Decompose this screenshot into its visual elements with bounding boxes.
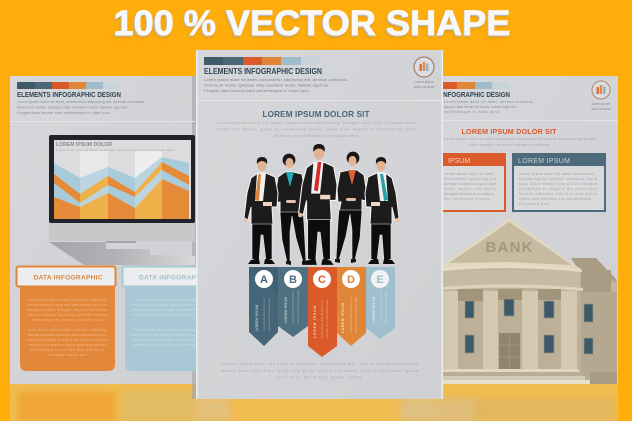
icon: chart badge: [413, 57, 435, 89]
box: slate lorem ipsum: Montes nascetur ridiculus mus donec: [519, 192, 597, 196]
box: red lorem ipsum: Natoque penatibus et magnis: [444, 192, 494, 196]
arrow: B: Lorem ipsum dolor sit amet cons: [291, 289, 295, 323]
box: slate lorem ipsum: Lorem ipsum dolor sit amet consectetur: [519, 172, 595, 176]
text block: Dolor massa cum sociis natoque penatibus: [469, 143, 549, 147]
icon: chart badge: [591, 81, 611, 111]
person: man red tie: [298, 144, 337, 265]
arrow: A: [249, 267, 278, 346]
card: orange text: nascetur ridiculus mus donec quam felis ultricies: [28, 343, 106, 347]
panel: right page: [406, 76, 618, 384]
box: slate lorem ipsum: Quam felis ultricies nec pellentesque: [519, 197, 591, 201]
monitor: [49, 135, 195, 265]
heading: lorem ipsum: LOREM IPSUM DOLOR SIT: [262, 110, 370, 119]
colour strip: [204, 57, 320, 65]
card: orange text: natoque penatibus et magnis dis parturient montes: [27, 338, 107, 342]
heading: ELEMENTS INFOGRAPHIC DESIGN: [406, 92, 510, 99]
card: orange text: [20, 287, 115, 371]
text block: Feugiat diam laoreet ante pellentesque in vitae nunc.: [204, 88, 310, 93]
arrow: A: A: [260, 274, 268, 286]
text block: [204, 77, 347, 93]
label: data infographic blue: DATA INFOGRAPHIC: [139, 274, 208, 282]
person: man orange tie: [244, 157, 278, 264]
arrow: D: [337, 267, 366, 346]
card: blue text: Aenean commodo ligula eget dolor massa: [132, 333, 195, 337]
box: slate lorem ipsum: Eget dolor massa cum sociis natoque: [519, 182, 597, 186]
card: orange text: nascetur ridiculus mus donec quam felis ultricies: [27, 313, 107, 317]
box: red lorem ipsum: Dis parturient montes: [444, 197, 490, 201]
card: orange text: Lorem ipsum dolor sit amet consectetur adipiscing: [28, 328, 106, 332]
title: 100 % VECTOR SHAPE: [114, 4, 511, 43]
text block: [444, 137, 596, 147]
card: orange text: pellentesque eu pretium quis sem nulla: [32, 318, 102, 322]
reflection band: [10, 384, 618, 421]
arrow: C: [308, 267, 337, 357]
box: red lorem ipsum: IPSUM: [448, 158, 470, 165]
icon: chart badge: Lorem ipsum: [414, 80, 434, 84]
arrow: D: D: [347, 274, 355, 286]
text block: Viverra mi mollis. Quisque vitae hendrerit turpis. Nullam eget leo: [204, 82, 328, 88]
text block: [17, 100, 144, 115]
card: blue text: [125, 287, 200, 371]
card: blue text: nascetur ridiculus mus donec quam felis: [132, 343, 195, 347]
icon: chart badge: dolor sit amet: [591, 107, 611, 111]
arrow: A: LOREM IPSUM: [255, 305, 259, 331]
arrow: B: Aenean commodo ligula eget: [296, 290, 300, 323]
box: red lorem ipsum: Consectetur adipiscing elit: [444, 177, 496, 181]
text block: footer: [222, 361, 419, 380]
icon: chart badge: Lorem ipsum: [592, 102, 611, 106]
illustration: bank: [443, 218, 617, 384]
card: orange text: Aenean commodo ligula eget dolor massa cum sociis: [27, 303, 107, 307]
text block: Viverra mi mollis. Quisque vitae hendrerit turpis. Nullam eget leo: [17, 106, 127, 110]
arrow: B: B: [289, 274, 297, 286]
card: blue text: Aenean commodo ligula eget dolor massa: [132, 303, 195, 307]
arrow: B: [278, 267, 308, 337]
icon: chart badge: dolor sit amet: [413, 85, 435, 89]
text block: Lorem ipsum dolor sit amet, aenean commodo: [444, 100, 533, 104]
panel: center page: [196, 50, 443, 399]
arrow: E: Lorem ipsum dolor sit amet cons: [379, 290, 383, 323]
label: data infographic orange: [16, 266, 116, 286]
arrow: D: Lorem ipsum dolor sit amet cons: [349, 296, 353, 333]
text block: ipsum vitae hendrerit turpis nullam eget leo: [444, 105, 516, 109]
text block: Lorem ipsum dolor sit amet, consectetur adipiscing elit. Aenean commodo: [204, 77, 347, 82]
card: blue text: Lorem ipsum dolor sit amet consectetur: [135, 298, 196, 302]
text block: Pretium nec Quisque vitae Quam ante: [274, 133, 359, 138]
box: red lorem ipsum: Lorem ipsum dolor sit amet: [444, 172, 494, 176]
box: slate lorem ipsum: Penatibus et magnis dis parturient: [519, 187, 597, 191]
text block: Lorem ipsum dolor sit amet consectetur adipiscing elit aenean commodo ligula eget: [444, 137, 596, 141]
arrow: D: LOREM IPSUM: [341, 303, 345, 333]
arrow: C: Lorem ipsum dolor sit amet cons: [320, 299, 324, 338]
arrow: C: Aenean commodo ligula eget: [325, 300, 329, 338]
label: data infographic blue: [122, 266, 208, 286]
monitor: Lorem ipsum dolor sit amet consectetur adipiscing elit aenean commodo ligula: [56, 148, 174, 152]
bank sign: BANK: [486, 239, 533, 256]
title: 100 % VECTOR SHAPE: [112, 5, 510, 44]
text block: footer: Info Plac Quid Hig Quae iacile: [276, 374, 362, 380]
card: orange text: consequat massa quis: [47, 353, 87, 357]
arrow: E: E: [376, 274, 384, 286]
text block: pellentesque in vitae nunc: [444, 110, 499, 114]
colour strip: [17, 82, 120, 89]
arrow: A: Aenean commodo ligula eget: [267, 298, 271, 331]
text block: Lorem ipsum dolor sit amet, consectetur adipiscing elit. Aenean commodo: [17, 100, 144, 104]
screen heading: LOREM IPSUM DOLOR: [56, 142, 112, 148]
colour strip: [443, 82, 509, 89]
panel: left page: [10, 76, 208, 399]
card: orange text: Aenean commodo ligula eget dolor massa cum sociis: [28, 333, 106, 337]
arrow: C: C: [318, 274, 326, 286]
title: 100 % VECTOR SHAPE: [112, 6, 510, 45]
heading: lorem ipsum: LOREM IPSUM DOLOR SIT: [462, 127, 557, 136]
illustration: business people: [244, 144, 400, 265]
card: orange text: Lorem ipsum dolor sit amet consectetur adipiscing: [28, 298, 106, 302]
box: slate lorem ipsum: LOREM IPSUM: [518, 158, 570, 165]
label: data infographic orange: DATA INFOGRAPHIC: [34, 274, 103, 282]
text block: [217, 120, 416, 138]
card: blue text: Lorem ipsum dolor sit amet consectetur: [135, 328, 196, 332]
card: blue text: natoque penatibus et magnis dis parturient: [132, 308, 195, 312]
card: orange text: pellentesque eu pretium quis sem nulla: [30, 348, 104, 352]
text block: Etiam nisi ipsum, quam ac vestibulum ipsum, Nunc nunc Mauris id lobortis nec sem: [217, 126, 416, 132]
card: orange text: natoque penatibus et magnis dis parturient montes: [27, 308, 107, 312]
text block: Lorem ipsum dolor sit amet, consectetur adipiscing. Integer sed velit id ipsum sem: [217, 120, 416, 125]
arrow: B: LOREM IPSUM: [284, 297, 288, 323]
box: slate lorem ipsum: Adipiscing elit aenean commodo ligula: [519, 177, 597, 181]
card: blue text: nascetur ridiculus mus donec quam felis: [132, 313, 195, 317]
text block: footer: Lorem ipsum dolor sit amet consectetur adipiscing elit. Sed ut perspiciatis unde: [222, 361, 419, 366]
heading: ELEMENTS INFOGRAPHIC DESIGN: [17, 92, 121, 99]
arrow: E: LOREM IPSUM: [372, 297, 376, 323]
arrow: E: [366, 267, 395, 339]
arrow: E: Aenean commodo ligula eget: [384, 291, 388, 323]
arrow: A: Lorem ipsum dolor sit amet cons: [262, 297, 266, 331]
box: slate lorem ipsum: [512, 153, 606, 211]
box: red lorem ipsum: Dolor massa cum sociis: [444, 187, 496, 191]
box: red lorem ipsum: Aenean commodo ligula eget: [444, 182, 496, 186]
box: slate lorem ipsum: Eu pretium quis: [519, 202, 549, 206]
person: woman teal top: [276, 154, 307, 265]
text block: footer: Nemo Tam nibh Plac Quid Hig Quaz aciem ius enim, nisi It is Lorem ipsum: [222, 368, 419, 373]
text block: Feugiat diam laoreet ante pellentesque in vitae nunc.: [17, 111, 111, 115]
area chart: [54, 157, 189, 219]
person: woman orange top: [335, 152, 366, 263]
box: red lorem ipsum: [420, 153, 506, 211]
person: man teal tie: [365, 157, 400, 264]
heading: ELEMENTS INFOGRAPHIC DESIGN: [204, 67, 322, 76]
text block: [444, 100, 533, 114]
arrow: D: Aenean commodo ligula eget: [354, 297, 358, 333]
card: blue text: natoque penatibus et magnis dis parturient: [132, 338, 195, 342]
arrow: C: LOREM IPSUM: [313, 306, 317, 338]
